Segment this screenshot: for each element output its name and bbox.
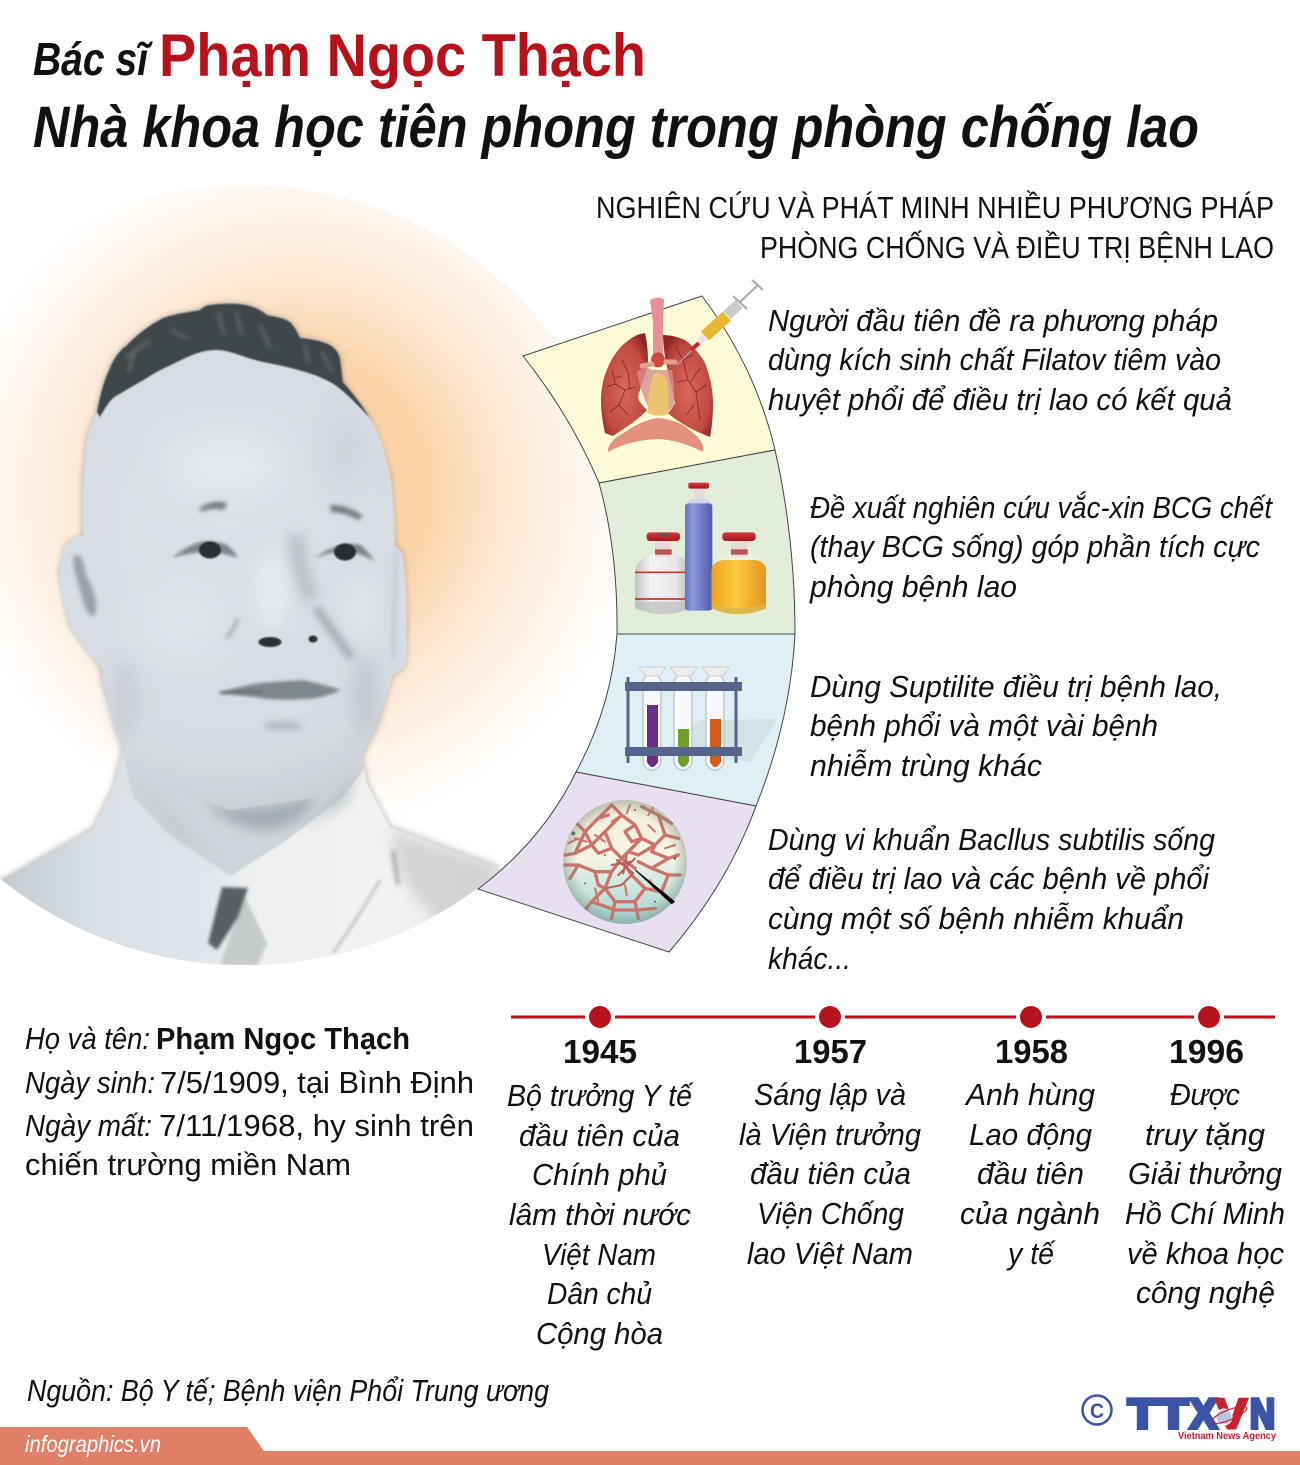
milestone 1957: Sáng lập và bbox=[754, 1077, 906, 1112]
rack shadow bbox=[665, 719, 778, 762]
milestone 1996: 1996 bbox=[1169, 1033, 1244, 1070]
biography block: 7/11/1968, hy sinh trên bbox=[159, 1108, 474, 1143]
milestone 1957: Viện Chống bbox=[757, 1196, 904, 1231]
milestone 1958 bbox=[960, 1033, 1100, 1271]
biography block: 7/5/1909, tại Bình Định bbox=[160, 1065, 474, 1100]
icon: lungs and syringe bbox=[601, 280, 763, 452]
text: item 3: bệnh phổi và một vài bệnh bbox=[810, 708, 1158, 743]
footer site label: infographics.vn bbox=[25, 1431, 161, 1457]
milestone 1958: Anh hùng bbox=[964, 1077, 1095, 1112]
timeline axis bbox=[511, 1006, 1275, 1028]
left eye bbox=[172, 541, 238, 558]
left nasolabial bbox=[226, 618, 238, 638]
left cheek highlight bbox=[135, 580, 225, 660]
hair bbox=[97, 304, 370, 418]
liquid orange bbox=[710, 719, 721, 767]
milestone 1945: 1945 bbox=[563, 1033, 637, 1070]
syringe nose bbox=[699, 337, 705, 342]
milestone 1957: là Viện trưởng bbox=[739, 1117, 921, 1152]
nose side shadow upper bbox=[296, 535, 312, 600]
logo letters: N bbox=[1250, 1390, 1275, 1437]
neck left shading bbox=[170, 818, 183, 832]
logo letters: V bbox=[1216, 1390, 1247, 1437]
footer bar bbox=[0, 1427, 1300, 1465]
left lung bbox=[601, 333, 648, 436]
pointer needle bbox=[635, 870, 674, 904]
panel: microscope bbox=[478, 772, 756, 952]
tie bbox=[208, 887, 267, 966]
panel: vials bbox=[599, 450, 795, 634]
right lung bbox=[663, 335, 713, 437]
milestone 1958: đầu tiên bbox=[977, 1156, 1084, 1191]
biography block: Ngày mất: bbox=[25, 1108, 152, 1143]
heart bbox=[648, 373, 669, 416]
milestone 1945: Chính phủ bbox=[532, 1157, 667, 1192]
jaw shading right bbox=[351, 655, 379, 735]
text: item 2: phòng bệnh lao bbox=[809, 569, 1017, 604]
lens vignette bbox=[563, 800, 687, 924]
tube rims bbox=[639, 667, 729, 676]
rack bars bbox=[625, 682, 742, 756]
curved band of four panels bbox=[478, 296, 795, 952]
peach halo disc bbox=[0, 185, 610, 796]
milestone 1957: lao Việt Nam bbox=[747, 1236, 913, 1271]
upper right head shade bbox=[323, 410, 367, 490]
head bbox=[59, 304, 407, 810]
timeline dot 1958 bbox=[1020, 1006, 1042, 1028]
logo letters bbox=[1128, 1390, 1275, 1437]
milestone 1996: công nghệ bbox=[1136, 1275, 1275, 1310]
white vial bbox=[635, 532, 690, 614]
text: item 4: để điều trị lao và các bệnh về phổi bbox=[768, 861, 1210, 896]
text: item 1: Người đầu tiên đề ra phương pháp bbox=[768, 303, 1218, 338]
bacteria web bbox=[565, 805, 680, 918]
icon: test tube rack bbox=[625, 667, 778, 770]
figure shadow bbox=[0, 304, 520, 980]
text: item 3 bbox=[810, 669, 1222, 783]
milestone 1958: của ngành bbox=[960, 1196, 1100, 1231]
text: item 3: nhiễm trùng khác bbox=[810, 748, 1042, 783]
title name: Phạm Ngọc Thạch bbox=[159, 22, 646, 89]
biography block bbox=[25, 1021, 474, 1182]
chin shadow bbox=[207, 795, 317, 830]
nose bridge highlight bbox=[259, 558, 286, 622]
timeline dot 1945 bbox=[589, 1006, 611, 1028]
right ear shadow bbox=[393, 550, 396, 660]
subtitle bbox=[596, 190, 1274, 265]
title bbox=[33, 22, 1199, 160]
text: item 2 bbox=[809, 490, 1273, 604]
right eye bbox=[315, 544, 375, 561]
pulmonary stubs bbox=[642, 362, 675, 366]
syringe hub bbox=[691, 343, 699, 350]
tube glass bbox=[643, 674, 724, 770]
text: item 4: cùng một số bệnh nhiễm khuẩn bbox=[768, 901, 1184, 936]
aorta bbox=[651, 352, 665, 368]
lower lip shadow bbox=[263, 722, 303, 730]
biography block: Họ và tên: bbox=[25, 1021, 150, 1056]
text: item 4: khác... bbox=[768, 941, 851, 976]
copyright mark bbox=[1082, 1396, 1112, 1424]
icon: vials bbox=[635, 483, 766, 614]
milestone 1996: Hồ Chí Minh bbox=[1125, 1196, 1285, 1231]
milestone 1996 bbox=[1125, 1033, 1285, 1310]
syringe barrel bbox=[705, 316, 727, 336]
bronchial branches bbox=[606, 347, 706, 420]
milestone 1945 bbox=[507, 1033, 695, 1351]
milestone 1945: Việt Nam bbox=[542, 1237, 656, 1272]
milestone 1957: đầu tiên của bbox=[750, 1156, 911, 1191]
forehead highlight bbox=[180, 441, 268, 487]
logo letters: T bbox=[1128, 1390, 1157, 1437]
right cheek highlight bbox=[344, 580, 380, 640]
milestone 1957 bbox=[739, 1033, 921, 1271]
diaphragm bbox=[608, 418, 703, 452]
milestone 1958: 1958 bbox=[995, 1033, 1068, 1070]
logo tagline: Vietnam News Agency bbox=[1178, 1430, 1276, 1442]
biography block: Ngày sinh: bbox=[25, 1065, 155, 1100]
biography block: chiến trường miền Nam bbox=[25, 1147, 351, 1182]
eyebrows bbox=[200, 502, 363, 520]
ear inner bbox=[73, 555, 96, 616]
milestone 1958: y tế bbox=[1006, 1236, 1057, 1271]
portrait with peach halo bbox=[0, 185, 635, 980]
rack posts bbox=[628, 677, 736, 763]
blue vial bbox=[685, 483, 712, 611]
collar crease bbox=[333, 880, 380, 953]
jaw shading left bbox=[107, 669, 136, 734]
text: item 4 bbox=[768, 822, 1215, 976]
liquid purple bbox=[647, 705, 658, 767]
logo letters: X bbox=[1190, 1390, 1217, 1437]
milestone 1996: truy tặng bbox=[1145, 1117, 1265, 1152]
liquid green bbox=[678, 729, 689, 767]
milestone 1996: Giải thưởng bbox=[1128, 1156, 1282, 1191]
syringe rear bbox=[727, 304, 739, 315]
milestone 1996: Được bbox=[1170, 1077, 1240, 1112]
timeline dot 1957 bbox=[819, 1006, 841, 1028]
timeline dot 1996 bbox=[1198, 1006, 1220, 1028]
syringe plunger bbox=[733, 280, 763, 309]
mouth bbox=[218, 680, 341, 700]
panel: lungs bbox=[523, 296, 775, 483]
copyright mark: C bbox=[1090, 1400, 1104, 1423]
shoulder shading right bbox=[392, 830, 497, 925]
milestone 1996: về khoa học bbox=[1127, 1236, 1284, 1271]
syringe needle bbox=[677, 350, 692, 365]
slide disc bbox=[563, 800, 687, 924]
biography block: Phạm Ngọc Thạch bbox=[156, 1021, 410, 1056]
milestone 1945: Bộ trưởng Y tế bbox=[507, 1078, 695, 1113]
neck right shading bbox=[308, 778, 360, 826]
milestone 1945: Cộng hòa bbox=[536, 1316, 663, 1351]
text: item 1: huyệt phổi để điều trị lao có kết quả bbox=[768, 382, 1232, 417]
milestone 1945: Dân chủ bbox=[547, 1276, 652, 1311]
text: item 4: Dùng vi khuẩn Bacllus subtilis sống bbox=[768, 822, 1215, 857]
title line 1 label: Bác sĩ bbox=[33, 33, 153, 85]
shoulder crease bbox=[393, 850, 398, 885]
neck bbox=[123, 750, 364, 876]
milestone 1945: đầu tiên của bbox=[519, 1118, 680, 1153]
milestone 1957: 1957 bbox=[794, 1033, 867, 1070]
logo globe bbox=[1210, 1403, 1248, 1427]
panel: test tubes bbox=[576, 634, 795, 806]
amber vial bbox=[712, 532, 766, 614]
nostrils bbox=[258, 636, 318, 647]
heart sac bbox=[637, 368, 674, 413]
text: item 1 bbox=[768, 303, 1232, 417]
milestone 1945: lâm thời nước bbox=[509, 1197, 691, 1232]
text: item 2: (thay BCG sống) góp phần tích cực bbox=[810, 529, 1260, 564]
logo: TTXVN bbox=[1082, 1390, 1276, 1442]
milestone 1958: Lao động bbox=[969, 1117, 1092, 1152]
slide speckles bbox=[571, 809, 676, 903]
text: item 3: Dùng Suptilite điều trị bệnh lao, bbox=[810, 669, 1222, 704]
shirt bbox=[2, 751, 498, 965]
source note: Nguồn: Bộ Y tế; Bệnh viện Phổi Trung ương bbox=[27, 1373, 549, 1408]
logo letters: T bbox=[1159, 1390, 1188, 1437]
trachea bbox=[650, 298, 664, 358]
nose side shadow lower bbox=[316, 608, 352, 658]
icon: microscope view bbox=[563, 800, 687, 924]
text: item 1: dùng kích sinh chất Filatov tiêm vào bbox=[768, 342, 1221, 377]
